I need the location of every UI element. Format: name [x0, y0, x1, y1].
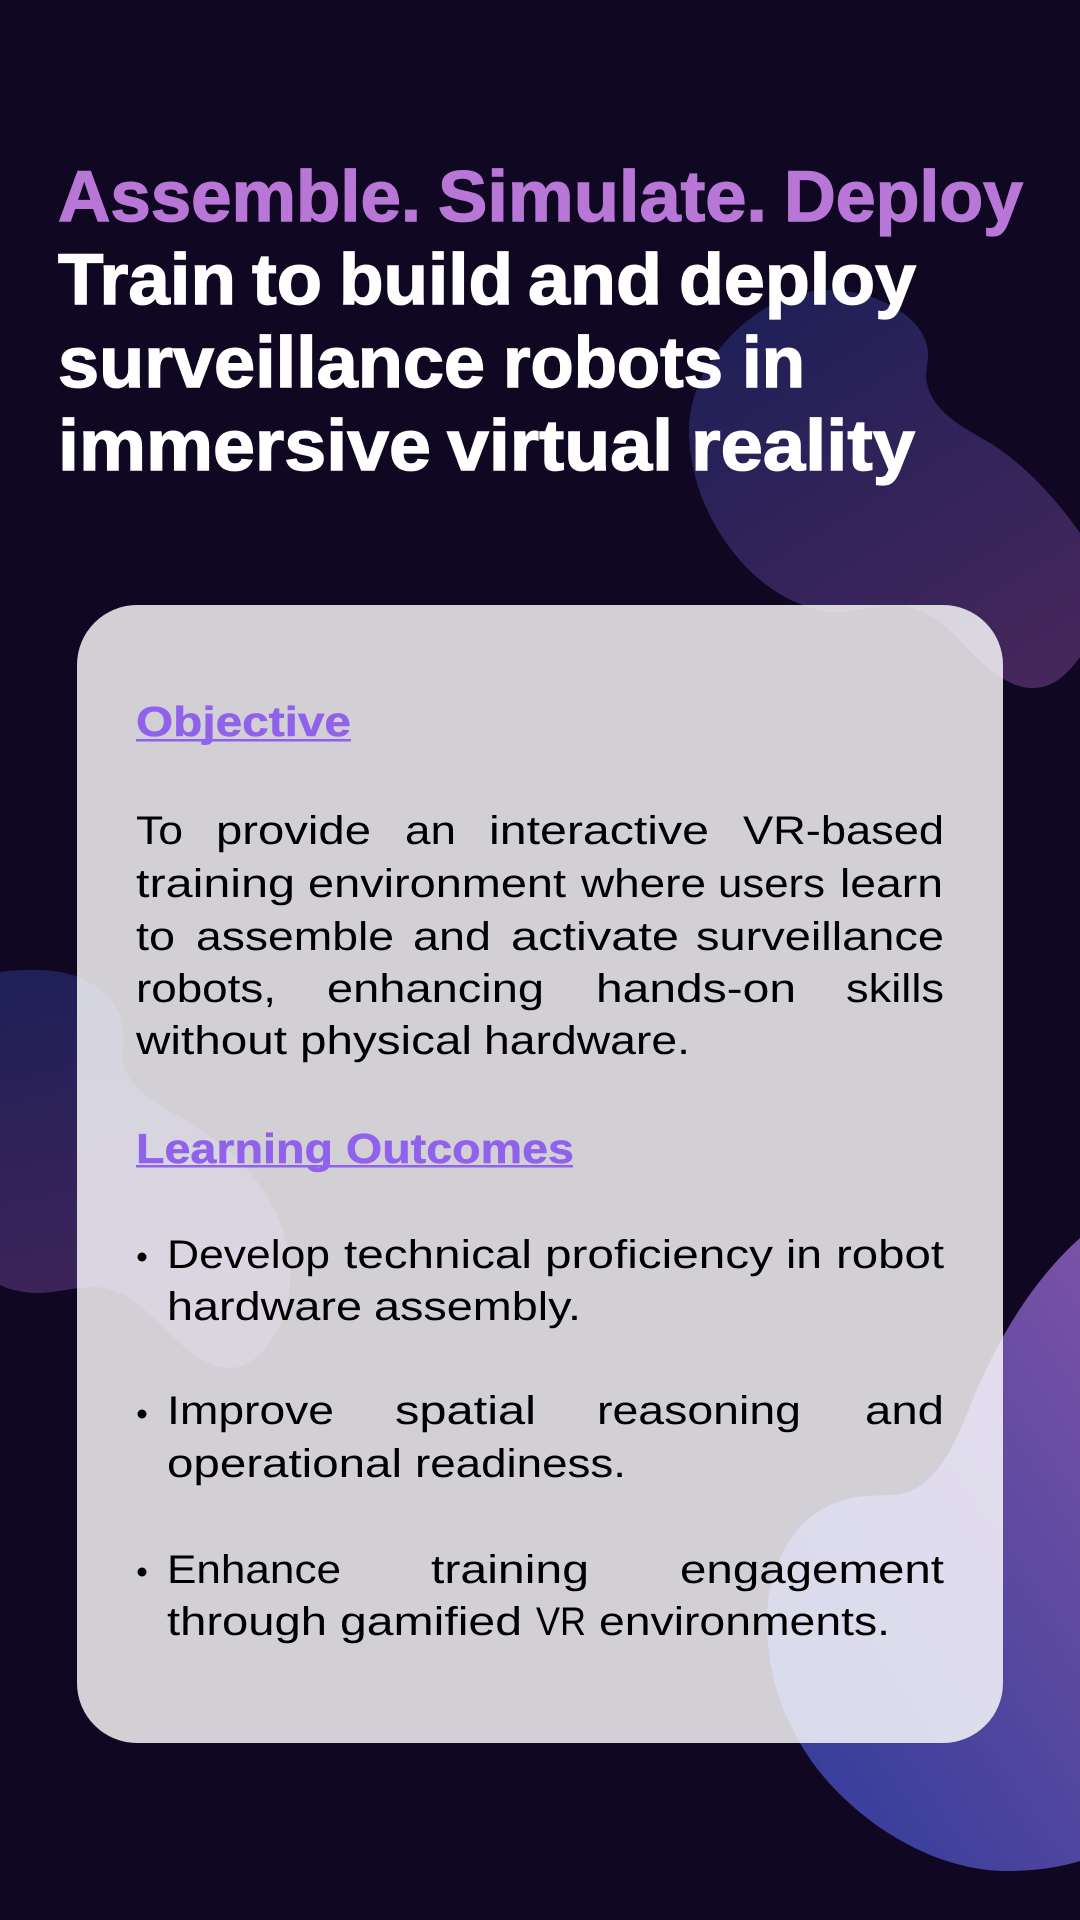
title line: Train to build and deploy: build [339, 240, 513, 320]
text block: objective paragraph: interactive [489, 809, 709, 853]
list item: hardware assembly: hardware [167, 1285, 362, 1329]
title line: Assemble. Simulate. Deploy: Assemble. [58, 157, 421, 237]
heading: Objective: Objective [136, 698, 351, 745]
text block: objective paragraph: to [136, 915, 175, 959]
list item: training engagement: Enhance [167, 1548, 341, 1592]
text block: objective paragraph: skills [846, 967, 944, 1011]
title line: Train to build and deploy: to [252, 240, 322, 320]
heading: Learning Outcomes: Learning Outcomes [136, 1125, 574, 1172]
list item: hardware assembly: assembly. [374, 1285, 581, 1329]
title line: surveillance robots in: robots [503, 323, 723, 403]
title line: Train to build and deploy: Train [58, 240, 236, 320]
list item: training engagement: engagement [680, 1548, 944, 1592]
list item: hardware assembly: technical [344, 1233, 532, 1277]
text block: objective paragraph: an [405, 809, 456, 853]
title line: immersive virtual reality: reality [691, 406, 915, 486]
text block: objective paragraph: provide [216, 809, 371, 853]
list item: training engagement [138, 1548, 944, 1644]
decorative blob: left [0, 970, 290, 1368]
list item: spatial reasoning: reasoning [597, 1389, 801, 1433]
title line: Assemble. Simulate. Deploy: Deploy [784, 157, 1023, 237]
text block: objective paragraph: assemble [196, 915, 394, 959]
text block: objective paragraph: users [718, 862, 825, 906]
list item: training engagement: VR [536, 1600, 586, 1644]
list item: spatial reasoning: readiness. [415, 1442, 626, 1486]
title [58, 157, 1023, 486]
text block: objective paragraph: where [580, 862, 706, 906]
title line: immersive virtual reality: virtual [447, 406, 673, 486]
text block: objective paragraph: physical [300, 1019, 472, 1063]
text block: objective paragraph: hardware. [484, 1019, 690, 1063]
list item: spatial reasoning: Improve [167, 1389, 334, 1433]
list item: hardware assembly: robot [836, 1233, 944, 1277]
text block: objective paragraph: enhancing [327, 967, 544, 1011]
list item: spatial reasoning [138, 1389, 944, 1486]
text block: objective paragraph: and [413, 915, 491, 959]
title line: Train to build and deploy: deploy [679, 240, 916, 320]
list item: training engagement: through [167, 1600, 327, 1644]
text block: objective paragraph: without [135, 1019, 287, 1063]
list item: hardware assembly: Develop [167, 1233, 330, 1277]
decorative blob: bottom right [767, 1238, 1080, 1871]
list item: hardware assembly [138, 1233, 944, 1329]
text block: objective paragraph: environment [308, 862, 566, 906]
text block: objective paragraph: VR-based [743, 809, 944, 853]
title line: immersive virtual reality: immersive [58, 406, 431, 486]
list item: hardware assembly: in [786, 1233, 822, 1277]
title line: Assemble. Simulate. Deploy: Simulate. [438, 157, 767, 237]
text block: objective paragraph: training [136, 862, 295, 906]
list item: hardware assembly: proficiency [545, 1233, 773, 1277]
list item: training engagement: gamified [340, 1600, 522, 1644]
text block: objective paragraph: To [136, 809, 183, 853]
list item: training engagement: training [431, 1548, 589, 1592]
list item: spatial reasoning: spatial [395, 1389, 536, 1433]
text block: objective paragraph: robots, [136, 967, 276, 1011]
title line: surveillance robots in: surveillance [58, 323, 485, 403]
title line: surveillance robots in: in [742, 323, 805, 403]
decorative blob: top right [689, 290, 1080, 688]
text block: objective paragraph: hands-on [596, 967, 796, 1011]
text block: objective paragraph: learn [840, 862, 943, 906]
list item: spatial reasoning: operational [167, 1442, 402, 1486]
text block: objective paragraph: surveillance [696, 915, 944, 959]
title line: Train to build and deploy: and [528, 240, 662, 320]
panel: content card [77, 605, 1003, 1743]
list item: spatial reasoning: and [865, 1389, 944, 1433]
text block: objective paragraph: activate [511, 915, 679, 959]
list item: training engagement: environments. [599, 1600, 890, 1644]
text block: objective paragraph [135, 809, 944, 1063]
